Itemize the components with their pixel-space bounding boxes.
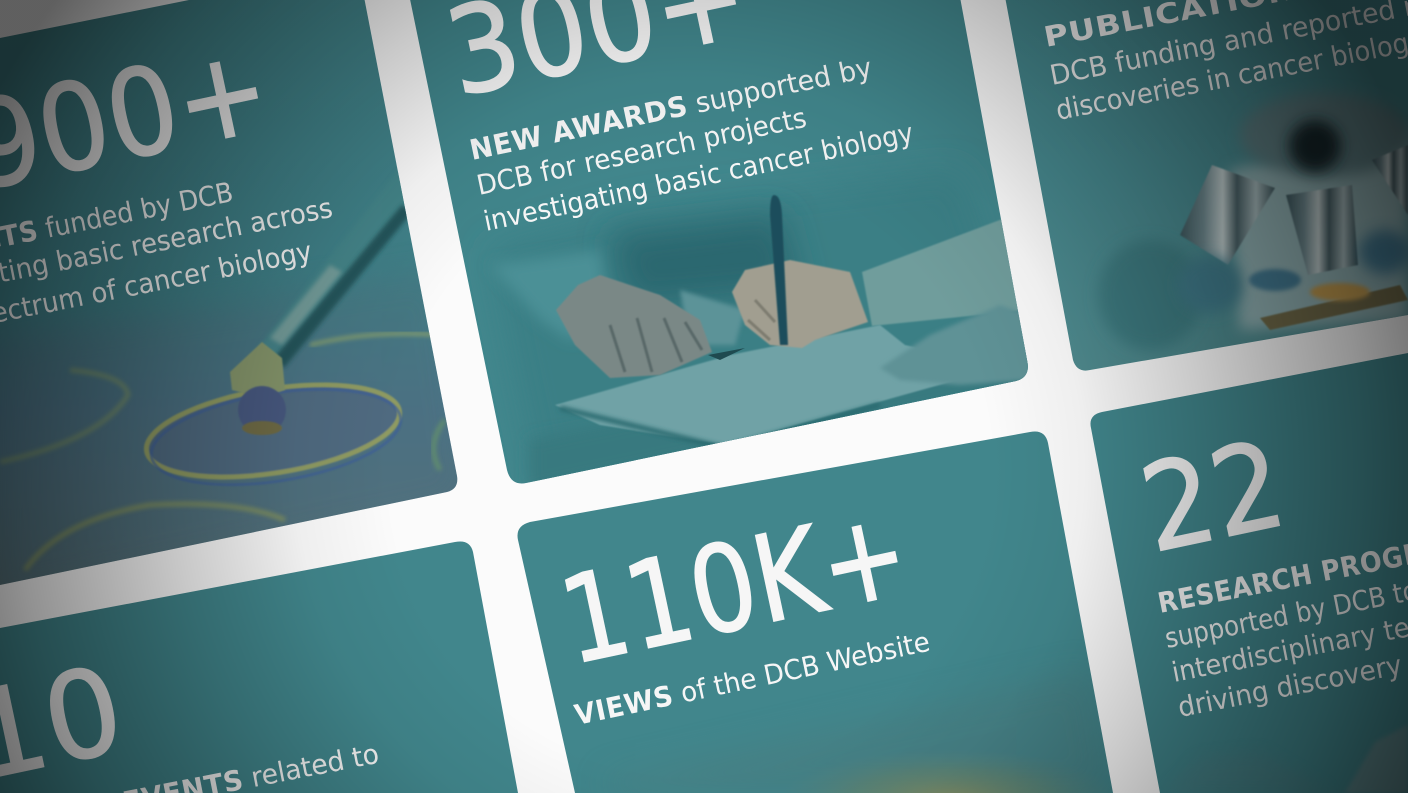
description: new awards: NEW AWARDS supported by [467,51,875,167]
photo: warm glow at the bottom [806,689,1104,793]
stat number: 110K+: 110K+ [549,484,920,692]
panel: new awards 300+ [404,0,1040,490]
description: new awards: DCB for research projects [474,102,809,202]
photo: microscope [1098,93,1408,350]
photo: molecular structure [1348,728,1407,792]
description: new awards: investigating basic cancer biology [481,117,916,238]
description: new awards [467,51,916,238]
panel: research programs 22 [1090,353,1408,793]
panel: publications [1000,0,1408,371]
panel: website views 110K+ [518,431,1120,793]
panel: events 10 [0,541,518,793]
stat number: 22: 22 [1130,415,1296,580]
description: research programs [1155,524,1408,724]
description: views: VIEWS of the DCB Website [572,625,933,732]
photo: hands signing a document [510,194,1028,484]
panel: projects 900+ [0,0,470,600]
photo: pipette and petri dishes [0,170,470,600]
